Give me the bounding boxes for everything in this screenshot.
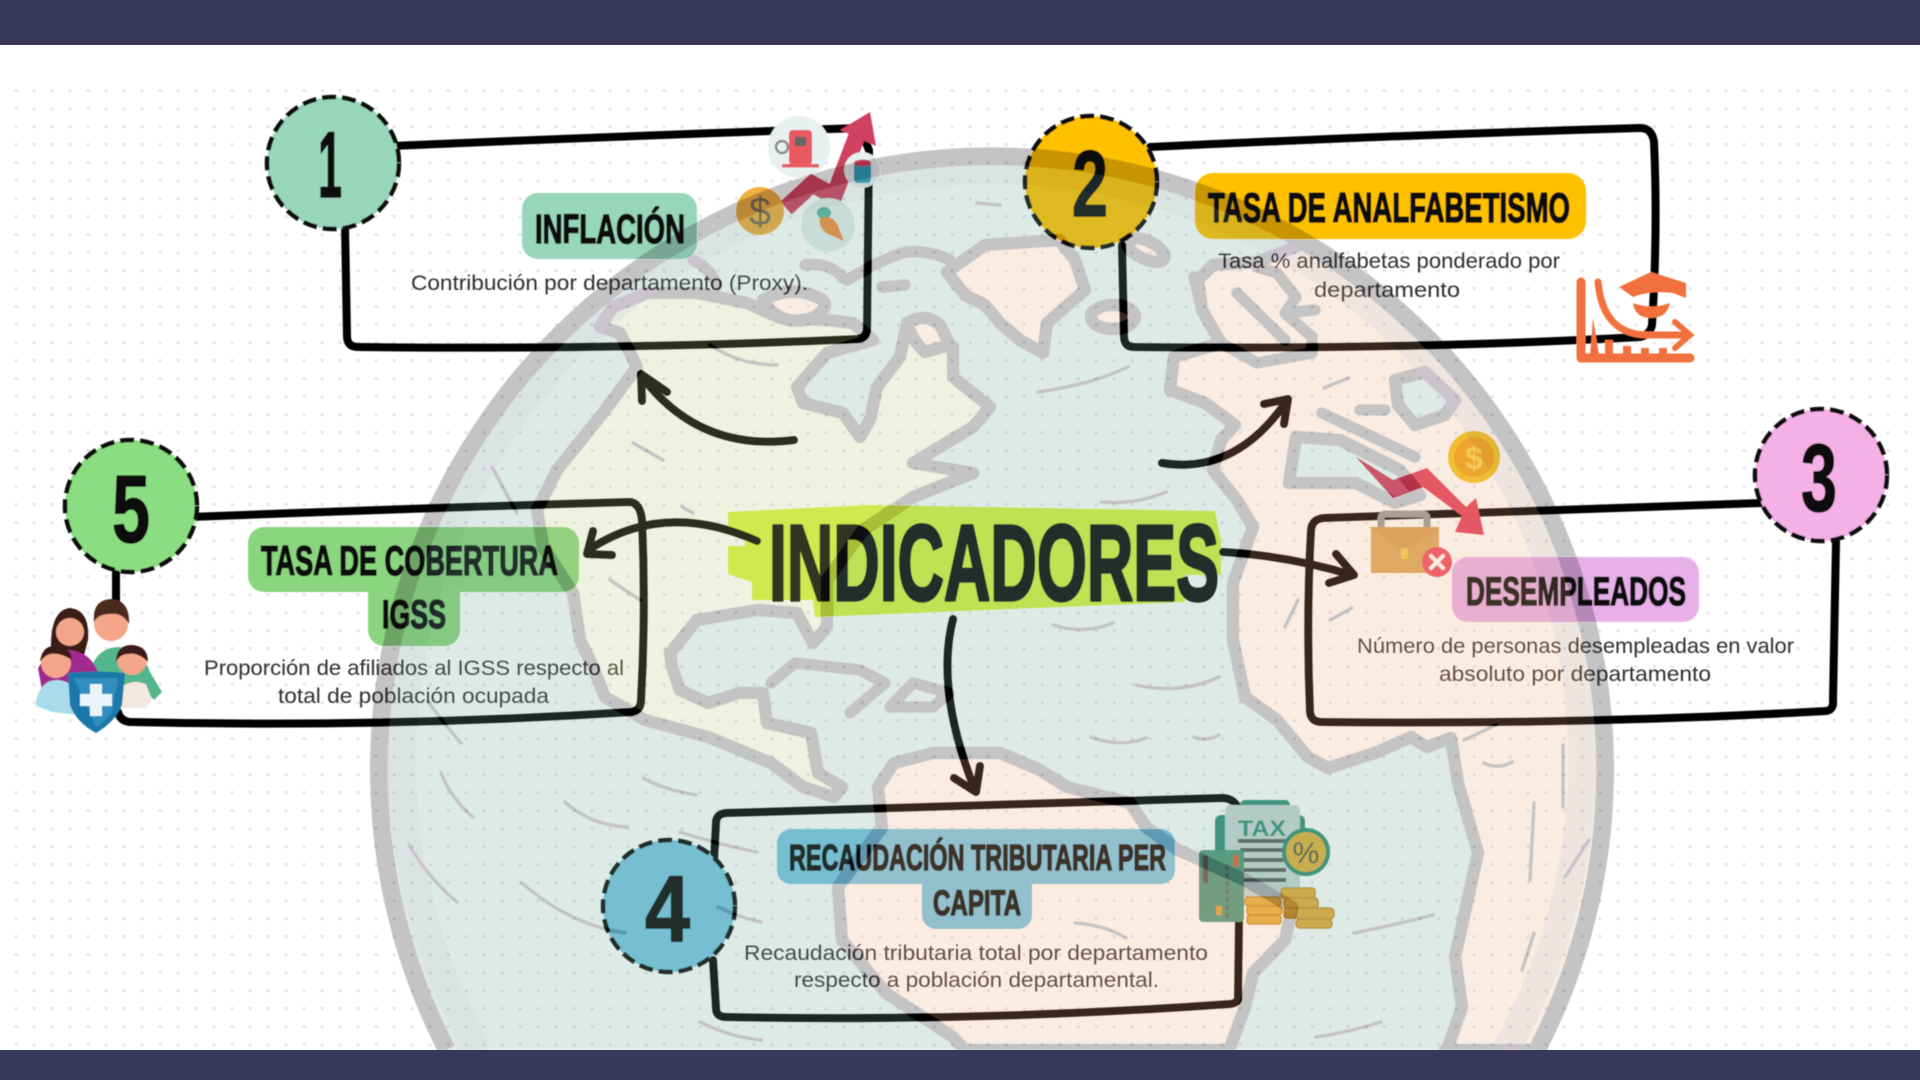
mediterranean — [1289, 437, 1420, 503]
heading pill: desempleados — [1452, 557, 1699, 622]
globe rim — [379, 156, 1605, 1050]
baffin — [907, 318, 950, 352]
badge 1: 1 — [318, 112, 342, 217]
description: inflacion: Contribución por departamento (Proxy). — [411, 272, 808, 295]
heading pill: inflacion — [522, 193, 697, 259]
icon: family with shield — [36, 599, 162, 733]
heading pill: recaudacion: CAPITA — [933, 884, 1021, 923]
badge 5 — [65, 440, 197, 572]
description: desempleados: absoluto por departamento — [1439, 663, 1711, 686]
panel: desempleados — [1308, 409, 1887, 723]
heading pill: desempleados: DESEMPLEADOS — [1466, 570, 1686, 614]
heading pill: analfabetismo — [1195, 173, 1586, 239]
rim shading — [402, 170, 1582, 1050]
heading pill: recaudacion — [777, 829, 1175, 929]
description: recaudacion: Recaudación tributaria total por departamento — [744, 942, 1208, 965]
caribbean and europe outlines — [693, 252, 1415, 713]
bottom bar — [0, 1050, 1920, 1080]
badge 4: 4 — [645, 856, 690, 961]
iceland — [1091, 305, 1135, 329]
north america — [537, 293, 990, 797]
heading pill: cobertura — [248, 527, 579, 646]
icon: tax document, card and coins: TAX — [1238, 816, 1286, 841]
central title: indicadores — [728, 502, 1221, 623]
description: desempleados: Número de personas desempleadas en valor — [1357, 635, 1794, 658]
panel: inflacion — [267, 97, 880, 348]
arrow: to analfabetismo — [1162, 399, 1288, 465]
arrow: to inflacion — [641, 374, 794, 442]
icon: inflation arrow with prices — [736, 112, 880, 252]
icon: inflation arrow with prices: $ — [749, 190, 771, 234]
panel: analfabetismo — [1025, 116, 1690, 358]
icon: declining chart with graduation cap — [1581, 272, 1690, 358]
icon: tax document, card and coins — [1199, 800, 1334, 928]
arrow: to recaudacion — [947, 619, 980, 792]
central title: indicadores: INDICADORES — [769, 502, 1219, 623]
badge 1 — [267, 97, 399, 229]
badge 2 — [1025, 116, 1157, 248]
eurasia and africa — [1170, 245, 1640, 1050]
globe illustration overlay — [370, 147, 1640, 1050]
arctic islands — [763, 292, 825, 321]
heading pill: inflacion: INFLACIÓN — [535, 206, 685, 252]
heading pill: analfabetismo: TASA DE ANALFABETISMO — [1208, 184, 1570, 231]
panel: recaudacion — [603, 798, 1334, 1018]
badge 3: 3 — [1801, 425, 1837, 532]
description: analfabetismo: departamento — [1314, 279, 1460, 302]
heading pill: recaudacion: RECAUDACIÓN TRIBUTARIA PER — [789, 836, 1166, 878]
svalbard — [1124, 233, 1168, 267]
arrow: to cobertura — [587, 522, 757, 555]
description: recaudacion: respecto a población departamental. — [794, 969, 1159, 992]
icon: tax document, card and coins: % — [1293, 837, 1319, 870]
ocean wave marks — [409, 203, 1589, 1040]
badge 5: 5 — [112, 456, 150, 563]
description: analfabetismo: Tasa % analfabetas ponderado por — [1218, 250, 1560, 273]
description: recaudacion — [744, 942, 1208, 992]
description: cobertura: total de población ocupada — [278, 685, 549, 708]
arrow: to desempleados — [1223, 552, 1354, 583]
badge 2: 2 — [1072, 131, 1108, 236]
top bar — [0, 0, 1920, 45]
south america — [838, 753, 1292, 1050]
badge 3 — [1755, 409, 1887, 541]
panel: cobertura IGSS — [36, 440, 644, 733]
heading pill: cobertura: TASA DE COBERTURA — [261, 537, 558, 584]
icon: briefcase, falling arrow and coin: $ — [1465, 440, 1483, 476]
badge 4 — [603, 840, 735, 972]
description: desempleados — [1357, 635, 1794, 686]
description: analfabetismo — [1218, 250, 1560, 302]
caspian — [1395, 372, 1455, 425]
greenland — [947, 240, 1085, 353]
description: cobertura — [204, 657, 624, 708]
description: cobertura: Proporción de afiliados al IGSS respecto al — [204, 657, 624, 680]
heading pill: cobertura: IGSS — [382, 593, 446, 637]
icon: briefcase, falling arrow and coin — [1356, 431, 1500, 577]
